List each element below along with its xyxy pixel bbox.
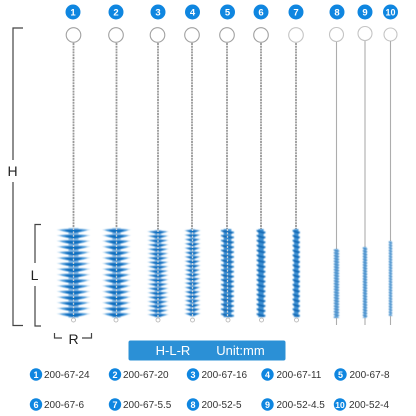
brush 6 (254, 4, 268, 322)
unit banner (128, 340, 286, 360)
brush 4: 4 (190, 8, 196, 18)
legend: model numbers: 4 (265, 370, 270, 380)
brush 10 (383, 4, 398, 325)
legend: model numbers: 200-67-20 (123, 370, 169, 381)
legend: model numbers: 200-52-4 (349, 400, 389, 411)
legend: model numbers (30, 368, 390, 411)
legend: model numbers: 8 (190, 400, 196, 410)
brush 9: 9 (362, 8, 368, 18)
legend: model numbers: 200-52-5 (202, 400, 242, 411)
brush 7: 7 (293, 8, 299, 18)
legend: model numbers: 7 (112, 400, 118, 410)
legend: model numbers: 3 (190, 370, 196, 380)
brush 5: 5 (225, 8, 231, 18)
legend: model numbers: 200-67-8 (350, 370, 390, 381)
brush 8 (330, 4, 344, 325)
legend: model numbers: 1 (33, 370, 39, 380)
legend: model numbers: 200-52-4.5 (276, 400, 325, 411)
brush 3: 3 (155, 8, 161, 18)
brush 2 (102, 4, 131, 322)
brush 8: 8 (334, 8, 340, 18)
legend: model numbers: 200-67-16 (202, 370, 248, 381)
brush 6: 6 (258, 8, 264, 18)
legend: model numbers: 200-67-24 (44, 370, 90, 381)
brush 3 (147, 4, 169, 322)
brush 5 (220, 4, 235, 322)
unit banner: Unit:mm (216, 343, 265, 358)
brush 9 (358, 4, 372, 325)
legend: model numbers: 9 (265, 400, 270, 410)
legend: model numbers: 200-67-11 (276, 370, 322, 381)
legend: model numbers: 2 (112, 370, 118, 380)
dimension L (31, 224, 41, 326)
legend: model numbers: 200-67-5.5 (123, 400, 172, 411)
dimension H: H (7, 163, 18, 179)
dimension R: R (68, 331, 79, 347)
legend: model numbers: 10 (335, 400, 345, 410)
dimension H (7, 28, 23, 326)
dimension R (54, 331, 92, 347)
legend: model numbers: 5 (338, 370, 343, 380)
brush 1: 1 (70, 8, 76, 18)
brush 7 (288, 4, 304, 322)
legend: model numbers: 6 (33, 400, 39, 410)
dimension L: L (31, 267, 39, 283)
brush 4 (184, 4, 201, 322)
brush 1 (56, 4, 90, 322)
legend: model numbers: 200-67-6 (44, 400, 84, 411)
brush 10: 10 (385, 8, 396, 18)
brush 2: 2 (113, 8, 119, 18)
unit banner: H-L-R (156, 343, 190, 358)
